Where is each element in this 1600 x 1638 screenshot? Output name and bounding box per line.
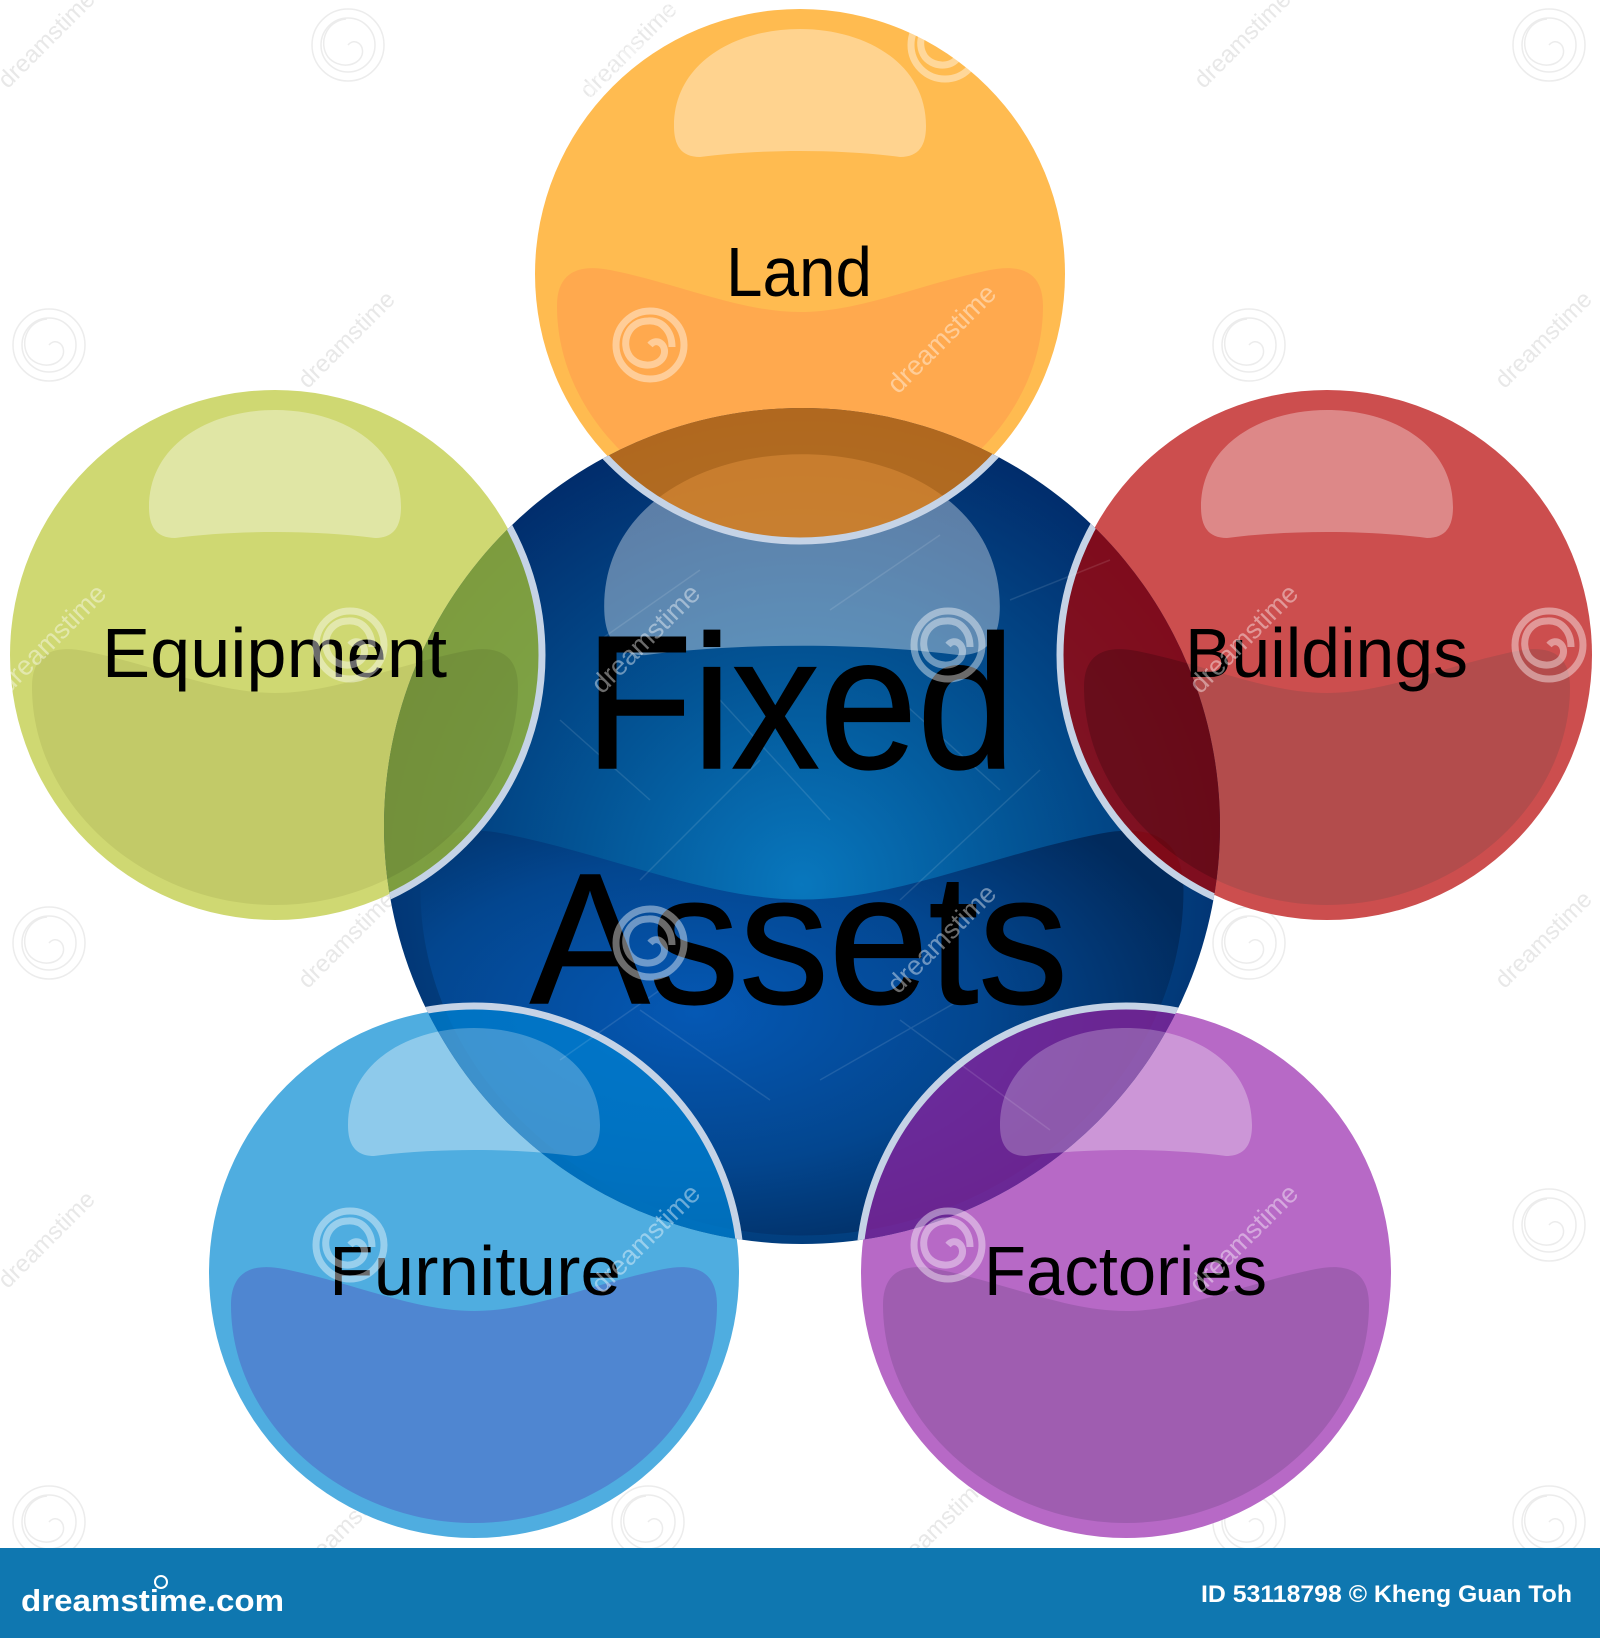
- title: Fixed Assets: [530, 597, 1068, 1043]
- label: Factories: Factories: [984, 1232, 1267, 1310]
- bubble overlap: Factories over centre: [858, 1002, 1178, 1240]
- footer bar: [0, 1548, 1600, 1638]
- bubble: Equipment: [10, 390, 540, 920]
- title: Fixed Assets: Assets: [530, 836, 1068, 1043]
- watermark: white spirals and marks on bubbles: dreamstime: [585, 578, 706, 699]
- watermark: white spirals and marks on bubbles: [0, 0, 1583, 1299]
- watermark: faint marks on white background: dreamstime: [886, 1471, 994, 1579]
- central circle: Fixed Assets bubble: [384, 408, 1220, 1244]
- bubble: Factories: [861, 1008, 1391, 1538]
- bubble: Land: [535, 9, 1065, 539]
- bubble overlap: Land over centre: [602, 408, 999, 544]
- label: Equipment: Equipment: [102, 614, 447, 692]
- bubble: Furniture: [209, 1008, 739, 1538]
- footer logo: dreamstime.com: dreamstime.com: [21, 1583, 284, 1618]
- watermark: white spirals and marks on bubbles: dreamstime: [1183, 1178, 1304, 1299]
- label: Furniture: Furniture: [329, 1232, 621, 1310]
- title: Fixed Assets: Fixed: [585, 597, 1015, 809]
- watermark: white spirals and marks on bubbles: dreamstime: [1183, 578, 1304, 699]
- bubble: Buildings: [1062, 390, 1592, 920]
- watermark: white spirals and marks on bubbles: dreamstime: [881, 878, 1002, 999]
- watermark: white spirals and marks on bubbles: dreamstime: [881, 278, 1002, 399]
- bubble overlap: Equipment over centre: [384, 525, 546, 900]
- label: Buildings: Buildings: [1185, 614, 1468, 692]
- watermark: white spirals and marks on bubbles: dreamstime: [585, 1178, 706, 1299]
- watermark: faint marks on white background: dreamstime: [293, 1471, 401, 1579]
- watermark: faint marks on white background: dreamstime: [1490, 886, 1598, 994]
- label: Land: Land: [726, 233, 872, 311]
- watermark: faint marks on white background: dreamstime: [293, 886, 401, 994]
- bubble overlap: Buildings over centre: [1056, 524, 1220, 900]
- watermark: faint marks on white background: dreamstime: [293, 286, 401, 394]
- bubble overlap: Furniture over centre: [426, 1002, 742, 1240]
- footer credit: image ID and author: ID 53118798 © Kheng Guan Toh: [1201, 1581, 1572, 1608]
- watermark: faint marks on white background: dreamstime: [1490, 286, 1598, 394]
